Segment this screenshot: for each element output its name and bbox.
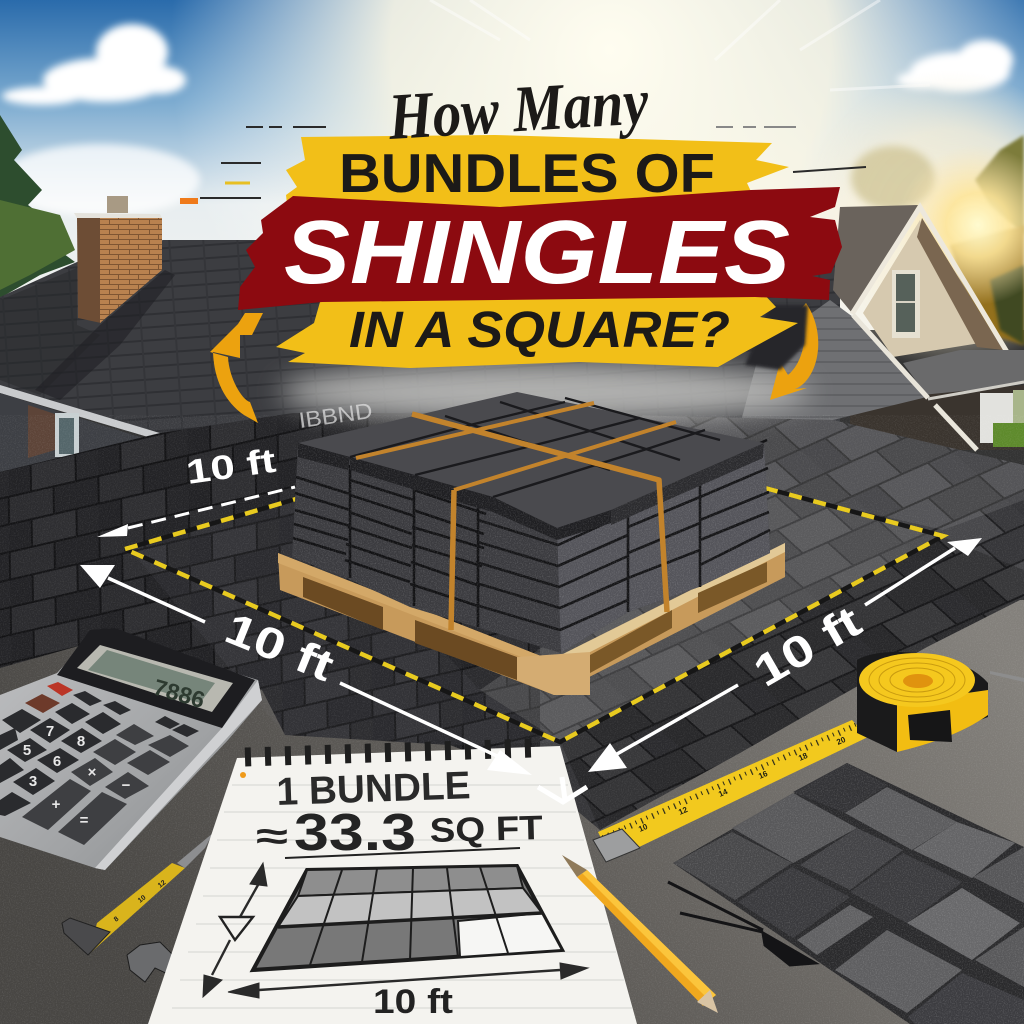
left house roof [0, 240, 300, 472]
triangle mark [220, 917, 253, 940]
calculator key labels: = [80, 812, 89, 829]
calculator key labels: + [52, 796, 61, 813]
orange straps [356, 403, 676, 630]
yellow brush top [286, 135, 789, 230]
tape measure strip: 14 [717, 787, 729, 799]
upper roof [833, 205, 918, 313]
note value: SQ FT [429, 809, 543, 850]
dark smudge behind right end of the lower banner [745, 305, 808, 370]
sky background [0, 0, 1024, 330]
calculator buttons [0, 682, 199, 845]
dimension labels [184, 442, 870, 697]
dimension labels: 10 ft [218, 604, 341, 691]
bundles side faces [292, 443, 770, 653]
lower house [850, 385, 1024, 450]
red brush [238, 187, 842, 310]
pallet [278, 543, 785, 695]
gable window [892, 270, 920, 338]
title line 2: BUNDLES OF [339, 142, 715, 204]
faded small label on the haze: IBBND [297, 398, 374, 433]
left-face layer gaps [293, 465, 486, 627]
tape measure strip: 18 [797, 751, 809, 763]
small tape with clips [62, 833, 213, 982]
calculator key labels: × [88, 764, 97, 781]
calculator key labels: 5 [23, 742, 31, 759]
spiral binding [245, 748, 532, 757]
vertical dimension arrow [203, 863, 267, 997]
top bundle seams [350, 398, 720, 497]
far roof behind the title [290, 240, 840, 425]
underline [285, 848, 520, 858]
small tape with clips: 12 [157, 879, 167, 890]
calculator top band [57, 628, 255, 728]
clouds [0, 24, 1013, 216]
porch roof [903, 350, 1024, 400]
title line 3: SHINGLES [284, 203, 790, 303]
note value [256, 804, 543, 862]
tape measure strip: 10 [637, 822, 649, 834]
title banner [238, 65, 842, 368]
dashed yellow square outline [125, 488, 943, 742]
haze above the stack [280, 362, 810, 422]
horizontal dimension arrow [228, 963, 588, 998]
chimney [74, 196, 162, 323]
foreground roof shingles [0, 413, 1024, 1024]
grid diagram [253, 866, 562, 970]
calculator display [77, 645, 233, 713]
small tape with clips: 8 [113, 916, 120, 924]
calculator key labels: 6 [53, 753, 61, 770]
note value: 33.3 [294, 804, 416, 862]
note heading: 1 BUNDLE [276, 764, 471, 814]
top bundle edges [298, 443, 764, 540]
speed lines [180, 127, 866, 201]
dimension labels: 10 ft [746, 597, 870, 697]
lower main roof [740, 300, 927, 425]
calculator key labels [23, 723, 131, 829]
top face [298, 392, 764, 528]
calculator key labels: 3 [29, 773, 37, 790]
right house [740, 205, 1024, 450]
tape measure strip: 12 [677, 805, 689, 817]
calculator key labels: 8 [77, 733, 85, 750]
small tape with clips: 10 [137, 894, 147, 905]
right-face layer gaps [476, 440, 770, 630]
notepad [148, 746, 637, 1024]
note value: ≈ [256, 816, 288, 858]
tape measure body [857, 652, 988, 752]
individual tiles [673, 763, 1024, 1024]
background trees and sun glow [800, 70, 1024, 370]
metal scrap at right edge [990, 671, 1024, 682]
lighter right-facing sides [557, 443, 770, 653]
calculator key labels: 7 [46, 723, 54, 740]
shingle grain texture [670, 760, 1024, 1024]
shingle bundle stack on pallet [278, 385, 785, 695]
dimension arrows [80, 487, 982, 802]
yellow brush bottom [276, 290, 798, 368]
title line 4: IN A SQUARE? [349, 301, 730, 358]
note bottom label: 10 ft [373, 983, 453, 1021]
orange curved arrows [210, 303, 818, 423]
left tree [0, 115, 75, 298]
calculator [0, 628, 262, 870]
stack grain texture [292, 443, 770, 652]
tape measure strip: 20 [835, 735, 847, 747]
pencil [562, 855, 718, 1013]
calculator key labels: − [122, 777, 131, 794]
shingle samples bottom right [670, 760, 1024, 1024]
gable wall [863, 220, 980, 357]
metal tool on shingles [668, 882, 815, 965]
title line 1: How Many [386, 65, 651, 154]
tape measure strip [593, 720, 868, 862]
base concrete surface [0, 600, 1024, 1024]
calculator display: 7886 [151, 674, 208, 713]
dimension labels: 10 ft [184, 442, 278, 492]
tape measure strip: 16 [757, 769, 769, 781]
